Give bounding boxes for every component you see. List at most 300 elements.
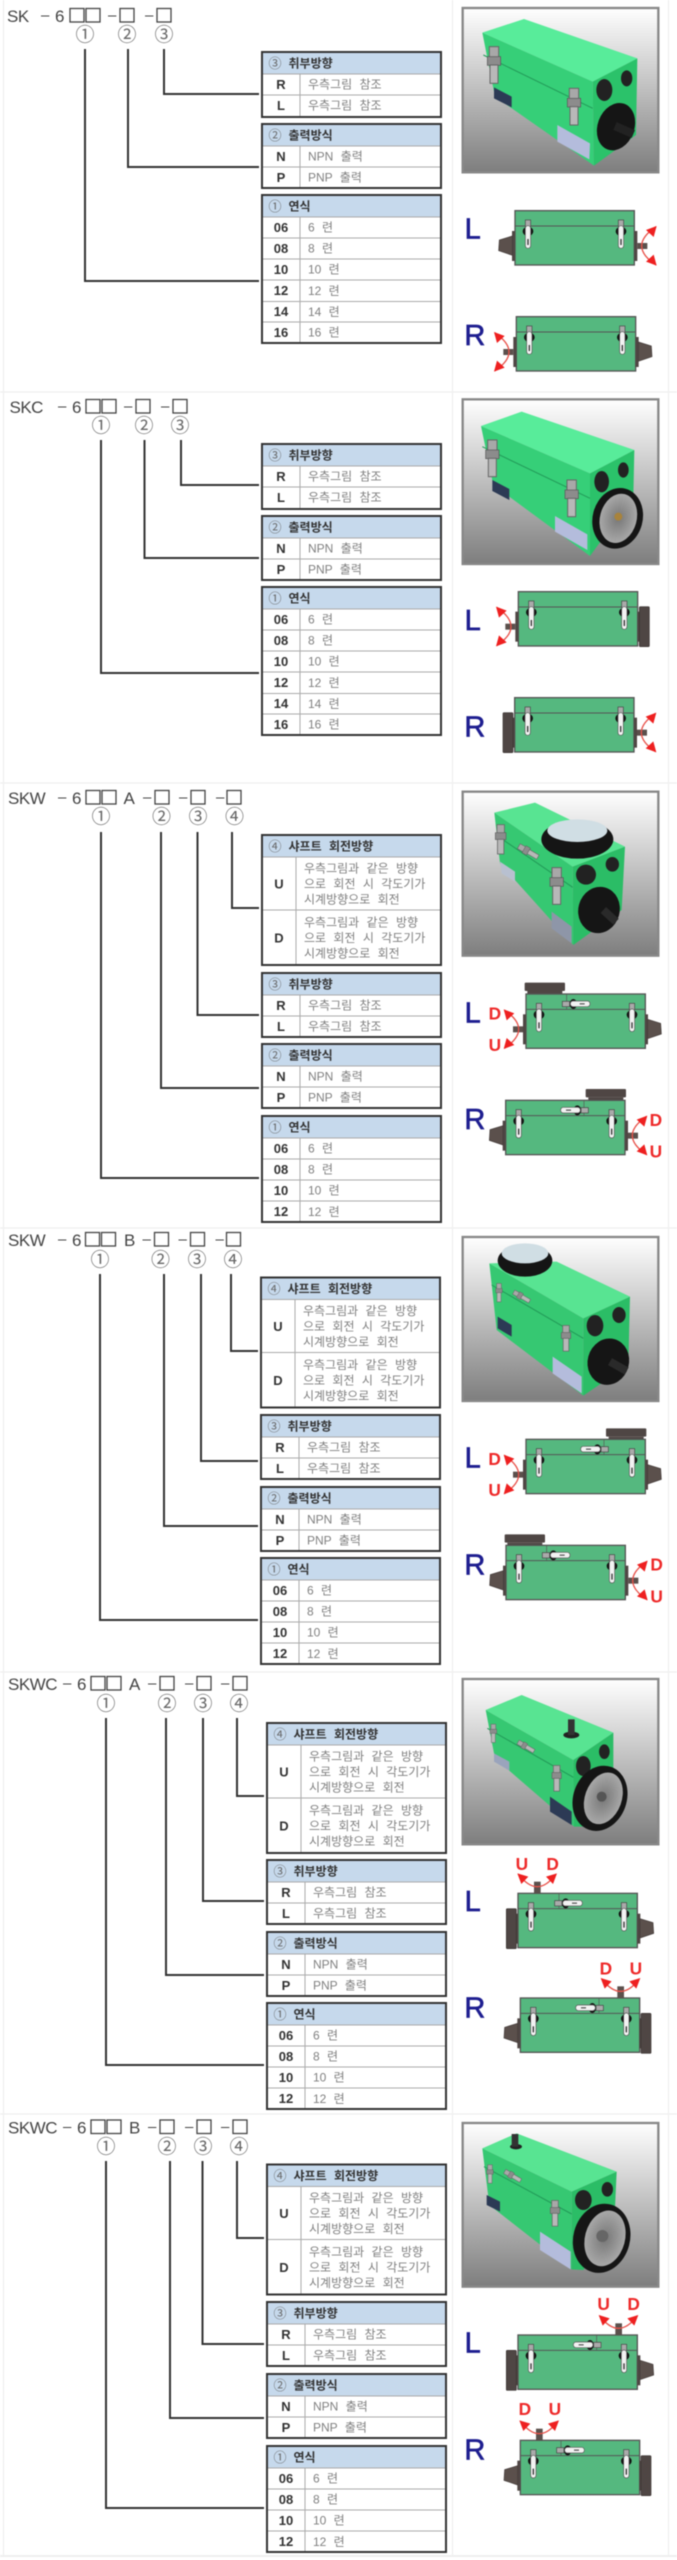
table: series count: 10 [274, 654, 288, 669]
table: series count: 08 [273, 1604, 287, 1619]
table: output type: NPN 출력 [307, 1512, 362, 1526]
diagram: L mount: U [488, 1480, 501, 1500]
table: series count: 8 련 [308, 634, 333, 648]
diagram: L mount: D [488, 1449, 501, 1469]
heading: SK model code: 6 [55, 7, 64, 26]
diagram: R mount [464, 1534, 663, 1607]
heading: SKW B model code: ① [90, 1249, 110, 1271]
heading: SKW B model code [8, 1231, 243, 1271]
connector lines [106, 1718, 264, 2065]
table: mounting direction: 우측그림 참조 [308, 98, 382, 112]
table: series count: 12 [274, 283, 288, 298]
diagram: L mount: U [489, 1035, 501, 1055]
heading: SKW A model code: A [124, 789, 136, 808]
heading: SKC model code: ① [91, 415, 111, 437]
table: series count [262, 195, 441, 343]
table: mounting direction: 우측그림 참조 [308, 998, 382, 1012]
diagram: R mount [464, 1958, 651, 2053]
diagram: R mount: R [464, 1992, 485, 2024]
diagram: R mount: U [630, 1958, 642, 1978]
table: series count: 연식 [288, 1562, 310, 1576]
table: output type: N [276, 1069, 286, 1084]
heading: SKW A model code: SKW [8, 789, 46, 808]
table: output type: ② [273, 2378, 287, 2393]
diagram: L mount: D [546, 1854, 559, 1874]
table: series count: 14 련 [308, 697, 340, 711]
photo: SK unit [463, 8, 658, 172]
table: output type: PNP 출력 [308, 1090, 362, 1104]
diagram: L mount: L [465, 605, 481, 637]
table: mounting direction: 취부방향 [294, 1864, 338, 1878]
table: series count: 8 련 [313, 2050, 338, 2064]
table: output type: N [281, 1957, 291, 1972]
table: mounting direction: 우측그림 참조 [308, 470, 382, 484]
table: mounting direction: 우측그림 참조 [313, 1906, 387, 1920]
table: mounting direction: R [281, 1885, 291, 1900]
table: mounting direction: 우측그림 참조 [307, 1440, 381, 1454]
table: shaft rotation: 샤프트 회전방향 [294, 1726, 378, 1742]
heading: SKW B model code: 6 [72, 1231, 81, 1250]
panel: SKW A series [8, 789, 662, 1222]
table: shaft rotation: 시계방향으로 회전 [304, 892, 400, 906]
table: output type [262, 1044, 441, 1108]
table: mounting direction: R [276, 469, 286, 484]
table: shaft rotation: U [273, 1319, 283, 1334]
table: series count: 8 련 [307, 1604, 332, 1618]
table: series count: ① [273, 2450, 287, 2465]
table: shaft rotation: 샤프트 회전방향 [288, 838, 373, 854]
table: series count: 12 [274, 675, 288, 690]
table: output type: NPN 출력 [308, 150, 363, 164]
heading: SKW B model code: B [124, 1231, 135, 1250]
table: series count: 12 [279, 2534, 293, 2549]
table: output type: P [282, 1978, 291, 1993]
heading: SKC model code: – [58, 398, 67, 415]
table: series count: 10 [279, 2070, 293, 2085]
heading: SKWC A model code: ④ [229, 1693, 249, 1715]
heading: SKC model code: ③ [170, 415, 190, 437]
table: series count: 12 련 [308, 1205, 340, 1219]
panel: SKW B series [8, 1231, 663, 1664]
table: output type [267, 1932, 446, 1996]
heading: SKWC B model code: SKWC [8, 2118, 57, 2138]
table: mounting direction: 취부방향 [288, 448, 333, 462]
table: shaft rotation: 시계방향으로 회전 [309, 1834, 405, 1848]
heading: SKWC A model code: ② [157, 1693, 177, 1715]
table: shaft rotation: 시계방향으로 회전 [304, 946, 400, 960]
table: output type: 출력방식 [294, 2378, 338, 2392]
table: output type: 출력방식 [288, 520, 333, 534]
table: output type: ② [273, 1936, 287, 1951]
table: shaft rotation: U [279, 2206, 289, 2221]
table: shaft rotation: 시계방향으로 회전 [309, 2276, 405, 2290]
heading: SKC model code [10, 398, 190, 437]
diagram: L mount: L [465, 2328, 481, 2360]
table: mounting direction: ③ [273, 1864, 287, 1879]
table: shaft rotation: D [279, 1818, 289, 1834]
heading: SKW B model code: – [142, 1231, 152, 1248]
table: series count [262, 587, 441, 735]
table: mounting direction [262, 444, 441, 509]
table: series count: 10 [279, 2513, 293, 2528]
photo: SKWC B unit [463, 2123, 658, 2287]
heading: SKC model code: ② [134, 415, 154, 437]
table: series count: ① [268, 591, 282, 606]
heading: SKW B model code: ④ [223, 1249, 243, 1271]
table: series count: 06 [273, 1583, 287, 1598]
heading: SKWC A model code [8, 1675, 249, 1715]
table: series count: 12 련 [308, 284, 340, 298]
heading: SKWC A model code: A [129, 1675, 141, 1694]
table: shaft rotation: ④ [273, 1727, 287, 1742]
photo: SKWC A unit [463, 1679, 658, 1844]
connector lines [101, 440, 259, 673]
table: shaft rotation [261, 1278, 440, 1408]
table: series count: 12 [273, 1646, 287, 1661]
heading: SKW A model code: ④ [225, 806, 244, 828]
table: shaft rotation: 으로 회전 시 각도기가 [304, 877, 425, 891]
heading: SKW B model code: SKW [8, 1231, 46, 1250]
diagram: R mount: D [650, 1110, 662, 1130]
table: output type: N [276, 149, 286, 164]
table: series count: 16 련 [308, 326, 340, 340]
table: series count: 12 련 [308, 676, 340, 690]
table: series count: ① [273, 2007, 287, 2022]
heading: SKW A model code: ③ [188, 806, 208, 828]
panel: SKC series [10, 398, 658, 753]
table: output type: N [276, 541, 286, 556]
panel: SKWC B series [8, 2118, 658, 2552]
table: series count: 08 [279, 2049, 293, 2064]
table: series count: 16 련 [308, 718, 340, 732]
table: shaft rotation: U [279, 1764, 289, 1780]
table: series count: 16 [274, 325, 288, 340]
heading: SK model code: – [108, 7, 117, 24]
table: series count: 10 련 [313, 2070, 345, 2084]
table: mounting direction: ③ [268, 448, 282, 463]
table: shaft rotation: 샤프트 회전방향 [288, 1281, 372, 1296]
heading: SK model code: ③ [154, 24, 174, 46]
table: shaft rotation: 으로 회전 시 각도기가 [309, 2206, 430, 2220]
table: shaft rotation: 시계방향으로 회전 [303, 1389, 399, 1403]
table: series count [262, 1116, 441, 1222]
table: series count [267, 2446, 446, 2552]
heading: SKWC A model code: SKWC [8, 1675, 57, 1694]
heading: SKWC A model code: ③ [193, 1693, 213, 1715]
diagram: R mount: R [464, 320, 485, 352]
diagram: L mount [465, 1428, 661, 1500]
table: output type [267, 2374, 446, 2438]
table: mounting direction: 취부방향 [288, 56, 333, 70]
table: mounting direction [262, 52, 441, 117]
table: output type: NPN 출력 [313, 2400, 368, 2414]
heading: SKW A model code: ① [91, 806, 111, 828]
table: series count: 8 련 [313, 2492, 338, 2506]
diagram: R mount [464, 1089, 662, 1162]
table: output type: P [277, 170, 286, 185]
heading: SKC model code: – [161, 398, 170, 415]
table: series count: 6 련 [308, 1142, 333, 1156]
table: shaft rotation: 시계방향으로 회전 [303, 1335, 399, 1349]
diagram: R mount: U [650, 1142, 662, 1162]
table: series count: 12 [274, 1204, 288, 1219]
table: mounting direction: ③ [267, 1419, 281, 1434]
heading: SKW A model code: – [58, 789, 67, 806]
table: output type: PNP 출력 [313, 1978, 367, 1992]
table: output type: ② [268, 520, 282, 535]
heading: SKWC A model code: – [185, 1675, 194, 1692]
diagram: R mount: D [600, 1958, 612, 1978]
table: series count: 12 [279, 2091, 293, 2106]
table: series count [261, 1558, 440, 1664]
table: series count: 10 [274, 262, 288, 277]
table: series count: 16 [274, 717, 288, 732]
table: output type: NPN 출력 [308, 1070, 363, 1084]
table: mounting direction [262, 973, 441, 1037]
table: shaft rotation: 우측그림과 같은 방향 [309, 1804, 423, 1818]
table: series count: 연식 [294, 2008, 316, 2022]
table: mounting direction: 우측그림 참조 [308, 78, 382, 92]
table: output type: 출력방식 [294, 1936, 338, 1950]
table: mounting direction: ③ [268, 56, 282, 71]
table: series count: 10 [273, 1625, 287, 1640]
table: mounting direction: R [276, 77, 286, 92]
heading: SKWC B model code: B [129, 2118, 140, 2138]
table: shaft rotation: 우측그림과 같은 방향 [304, 916, 418, 930]
table: series count: 10 련 [308, 262, 340, 276]
table: shaft rotation: 우측그림과 같은 방향 [309, 2245, 423, 2259]
table: output type: PNP 출력 [313, 2420, 367, 2434]
table: output type: ② [267, 1491, 281, 1506]
heading: SKWC A model code: ① [96, 1693, 116, 1715]
heading: SKWC B model code: ③ [193, 2136, 213, 2158]
table: series count: 08 [274, 633, 288, 648]
heading: SKW A model code: – [143, 789, 152, 806]
heading: SKW B model code: – [178, 1231, 188, 1248]
table: shaft rotation: D [279, 2260, 289, 2275]
table: output type: N [281, 2399, 291, 2414]
heading: SKWC B model code: ① [96, 2136, 116, 2158]
heading: SKWC A model code: – [148, 1675, 157, 1692]
diagram: R mount: R [464, 1549, 485, 1581]
diagram: L mount [465, 983, 661, 1055]
diagram: R mount: U [650, 1587, 663, 1607]
table: shaft rotation: 우측그림과 같은 방향 [309, 2191, 423, 2205]
table: output type: ② [268, 128, 282, 143]
table: series count: 12 련 [313, 2092, 345, 2106]
table: series count: 6 련 [308, 220, 333, 234]
table: series count: 6 련 [313, 2472, 338, 2486]
heading: SKWC B model code: – [221, 2118, 230, 2136]
table: output type: NPN 출력 [308, 542, 363, 556]
table: shaft rotation: 으로 회전 시 각도기가 [303, 1320, 424, 1334]
diagram: L mount [465, 211, 657, 266]
heading: SK model code: ① [75, 24, 95, 46]
heading: SK model code: – [41, 7, 50, 24]
table: series count: 06 [279, 2028, 293, 2043]
table: series count: 06 [274, 612, 288, 627]
table: mounting direction: 취부방향 [294, 2306, 338, 2320]
table: series count: 14 [274, 696, 289, 711]
heading: SKW B model code: – [216, 1231, 224, 1248]
heading: SKWC A model code: 6 [77, 1675, 86, 1694]
diagram: L mount: U [516, 1854, 528, 1874]
heading: SKWC B model code: ④ [229, 2136, 249, 2158]
table: shaft rotation: D [274, 930, 284, 946]
connector lines [100, 1274, 258, 1620]
table: output type [262, 124, 441, 188]
table: mounting direction [261, 1415, 440, 1479]
table: series count: 8 련 [308, 1162, 333, 1176]
heading: SKWC B model code: 6 [77, 2118, 86, 2138]
table: output type: PNP 출력 [307, 1534, 361, 1548]
table: series count: 06 [274, 220, 288, 235]
table: shaft rotation: 으로 회전 시 각도기가 [304, 931, 425, 945]
diagram: R mount: U [549, 2399, 561, 2419]
table: series count: 10 련 [313, 2514, 345, 2528]
diagram: R mount: D [519, 2399, 531, 2419]
heading: SKWC B model code: ② [157, 2136, 177, 2158]
table: series count: 08 [274, 1162, 288, 1177]
diagram: R mount [464, 698, 656, 753]
diagram: R mount [464, 317, 652, 372]
table: shaft rotation: 으로 회전 시 각도기가 [303, 1374, 424, 1388]
heading: SKWC B model code: – [63, 2118, 72, 2136]
table: mounting direction: 취부방향 [288, 976, 333, 992]
diagram: R mount: R [464, 1104, 485, 1136]
table: shaft rotation: 으로 회전 시 각도기가 [309, 2260, 430, 2274]
heading: SKC model code: 6 [72, 398, 81, 417]
table: mounting direction: R [276, 998, 286, 1013]
table: mounting direction: 취부방향 [288, 1418, 332, 1434]
heading: SKW B model code: ② [151, 1249, 170, 1271]
diagram: L mount [465, 1854, 654, 1949]
table: series count: ① [267, 1562, 281, 1577]
table: output type [261, 1487, 440, 1551]
table: mounting direction: 우측그림 참조 [313, 1886, 387, 1900]
diagram: L mount: L [465, 1886, 481, 1918]
heading: SKW A model code: – [216, 789, 225, 806]
table: series count [267, 2003, 446, 2109]
diagram: L mount: L [465, 1443, 481, 1475]
table: series count: 6 련 [308, 612, 333, 626]
heading: SKWC A model code: – [221, 1675, 230, 1692]
table: series count: 08 [274, 241, 288, 256]
table: shaft rotation: U [274, 876, 284, 892]
table: mounting direction: 우측그림 참조 [313, 2328, 387, 2342]
table: output type: N [275, 1512, 285, 1527]
table: mounting direction: 우측그림 참조 [308, 490, 382, 504]
table: series count: 연식 [288, 1120, 311, 1134]
table: series count: 10 [274, 1183, 288, 1198]
table: mounting direction: R [281, 2327, 291, 2342]
table: output type: P [276, 1533, 285, 1548]
table: output type: ② [268, 1048, 282, 1063]
diagram: L mount [465, 2294, 654, 2390]
table: series count: 10 련 [308, 654, 340, 668]
table: output type: 출력방식 [288, 1048, 333, 1062]
table: shaft rotation: ④ [267, 1282, 281, 1296]
table: series count: 12 련 [313, 2535, 345, 2549]
table: series count: 12 련 [307, 1647, 339, 1661]
heading: SKC model code: – [124, 398, 133, 415]
table: output type: 출력방식 [288, 128, 333, 142]
table: shaft rotation: 우측그림과 같은 방향 [303, 1358, 417, 1372]
table: series count: ① [268, 199, 282, 214]
table: output type: NPN 출력 [313, 1958, 368, 1972]
heading: SK model code: SK [7, 7, 30, 26]
table: mounting direction: L [277, 490, 285, 505]
diagram: R mount [464, 2399, 651, 2496]
table: mounting direction: 우측그림 참조 [313, 2348, 387, 2362]
table: series count: 8 련 [308, 242, 333, 256]
table: shaft rotation: 시계방향으로 회전 [309, 2222, 405, 2236]
photo: SKC unit [463, 399, 658, 564]
table: series count: 10 련 [308, 1184, 340, 1198]
table: shaft rotation: 우측그림과 같은 방향 [303, 1304, 417, 1318]
table: series count: 연식 [288, 200, 311, 214]
table: mounting direction: 우측그림 참조 [307, 1462, 381, 1476]
table: shaft rotation: 으로 회전 시 각도기가 [309, 1819, 430, 1833]
table: shaft rotation: ④ [268, 839, 282, 854]
heading: SKWC B model code: – [185, 2118, 194, 2136]
diagram: R mount: R [464, 712, 485, 744]
heading: SK model code [7, 7, 174, 46]
table: mounting direction: L [282, 1906, 290, 1921]
table: mounting direction: 우측그림 참조 [308, 1020, 382, 1034]
photo: SKW A unit [463, 792, 658, 956]
table: shaft rotation: 우측그림과 같은 방향 [309, 1750, 423, 1764]
connector lines [101, 832, 259, 1178]
heading: SKC model code: SKC [10, 398, 43, 417]
table: output type: P [282, 2420, 291, 2435]
table: mounting direction: ③ [273, 2306, 287, 2321]
table: output type: P [277, 562, 286, 577]
diagram: L mount: L [465, 997, 481, 1029]
diagram: R mount: R [464, 2434, 485, 2466]
table: shaft rotation: ④ [273, 2168, 287, 2184]
table: series count: ① [268, 1120, 282, 1135]
diagram: L mount: D [627, 2294, 640, 2314]
diagram: L mount: U [597, 2294, 610, 2314]
panel: SK series [7, 7, 658, 372]
diagram: L mount: D [489, 1003, 501, 1023]
table: series count: 6 련 [307, 1584, 332, 1598]
table: output type: 출력방식 [288, 1492, 332, 1506]
heading: SKW B model code: – [58, 1231, 67, 1248]
table: output type: PNP 출력 [308, 562, 362, 576]
heading: SKWC A model code: – [63, 1675, 72, 1692]
table: mounting direction: L [277, 98, 285, 113]
table: shaft rotation: 샤프트 회전방향 [294, 2168, 378, 2183]
table: series count: 연식 [288, 592, 311, 606]
table: series count: 14 련 [308, 305, 340, 319]
heading: SKW A model code [8, 789, 244, 828]
table: shaft rotation [267, 2164, 446, 2294]
heading: SKW A model code: 6 [72, 789, 81, 808]
heading: SKWC B model code [8, 2118, 249, 2158]
panel: SKWC A series [8, 1675, 658, 2109]
table: mounting direction: L [277, 1019, 285, 1034]
table: shaft rotation [262, 835, 441, 965]
table: output type: PNP 출력 [308, 170, 362, 184]
table: series count: 06 [279, 2471, 293, 2486]
table: output type: P [277, 1090, 286, 1105]
heading: SKW A model code: ② [152, 806, 171, 828]
table: shaft rotation: 우측그림과 같은 방향 [304, 862, 418, 876]
table: series count: 08 [279, 2492, 293, 2507]
table: mounting direction: R [275, 1440, 285, 1455]
